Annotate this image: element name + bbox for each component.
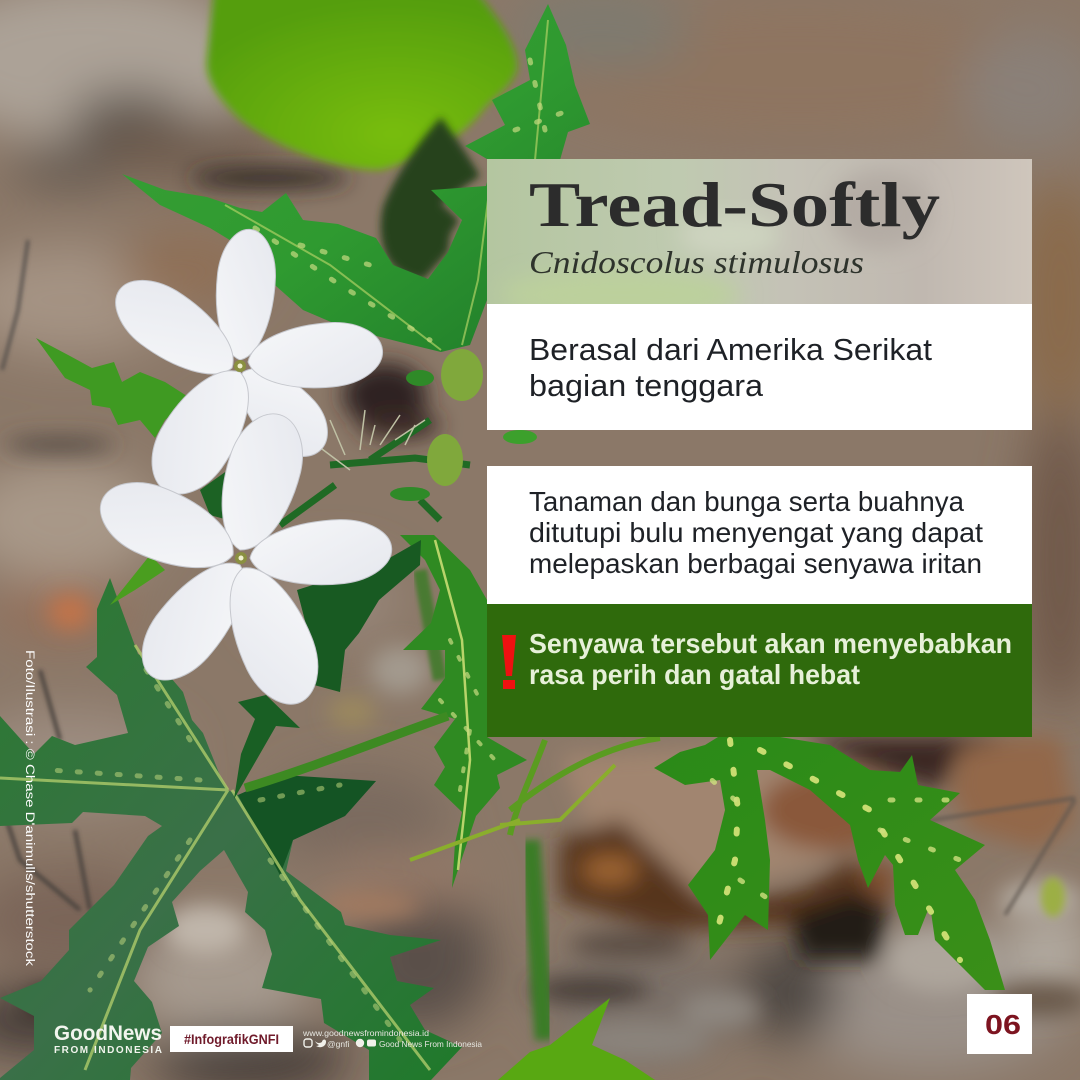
- logo: GoodNews from Indonesia: GoodNews: [54, 1022, 162, 1045]
- icon: twitter: [315, 1039, 326, 1047]
- page number: 06: [985, 1009, 1021, 1040]
- social links: www.goodnewsfromindonesia.id: [302, 1028, 429, 1038]
- panel: origin: [487, 304, 1032, 430]
- panel: origin: bagian tenggara: [529, 368, 764, 403]
- panel: origin: Berasal dari Amerika Serikat: [529, 332, 932, 367]
- flower: upper white flower: [101, 227, 385, 510]
- panel: description: Tanaman dan bunga serta buahnya: [529, 486, 964, 517]
- icon: youtube: [367, 1040, 376, 1046]
- panel: title: [487, 159, 1032, 304]
- panel: description: ditutupi bulu menyengat yang dapat: [529, 517, 983, 548]
- hashtag badge: [170, 1026, 293, 1052]
- leaf: centre vertical leaf: [400, 535, 527, 888]
- icon: instagram: [304, 1039, 312, 1047]
- social links: Good News From Indonesia: [379, 1039, 482, 1049]
- logo: GoodNews from Indonesia: FROM INDONESIA: [54, 1045, 162, 1056]
- leaf: right spiky leaf: [654, 737, 1005, 990]
- panel: warning: [487, 604, 1032, 737]
- panel: warning: Senyawa tersebut akan menyebabkan: [529, 628, 1012, 659]
- panel: description: [487, 466, 1032, 604]
- leaf: upper spiky leaf: [122, 4, 590, 352]
- page number: [967, 994, 1032, 1054]
- social links: @gnfi: [327, 1039, 349, 1049]
- blurred green leaf at top: [207, 0, 517, 279]
- hashtag badge: #InfografikGNFI: [184, 1032, 279, 1047]
- stem: behind centre leaf: [420, 570, 440, 680]
- panel: description: melepaskan berbagai senyawa iritan: [529, 548, 982, 579]
- social links: [302, 1028, 482, 1049]
- logo: GoodNews from Indonesia: [54, 1022, 162, 1056]
- panel: warning: rasa perih dan gatal hebat: [529, 659, 860, 690]
- leaf: large lower-left leaf: [0, 578, 462, 1080]
- leaf: small left leaf: [36, 338, 190, 438]
- stems and buds: [245, 349, 660, 1040]
- photo credit: Foto/Ilustrasi : © Chase D'animulls/shutterstock: [23, 650, 35, 966]
- leaf: dark lobes beside flower: [110, 470, 421, 799]
- icon: facebook: [356, 1039, 364, 1047]
- leaf: bottom bright leaf: [498, 998, 655, 1080]
- subheading: scientific name: Cnidoscolus stimulosus: [529, 244, 864, 280]
- flower: lower white flower: [88, 405, 394, 717]
- icon: red exclamation mark: [502, 635, 516, 689]
- heading: plant name: Tread-Softly: [529, 169, 940, 240]
